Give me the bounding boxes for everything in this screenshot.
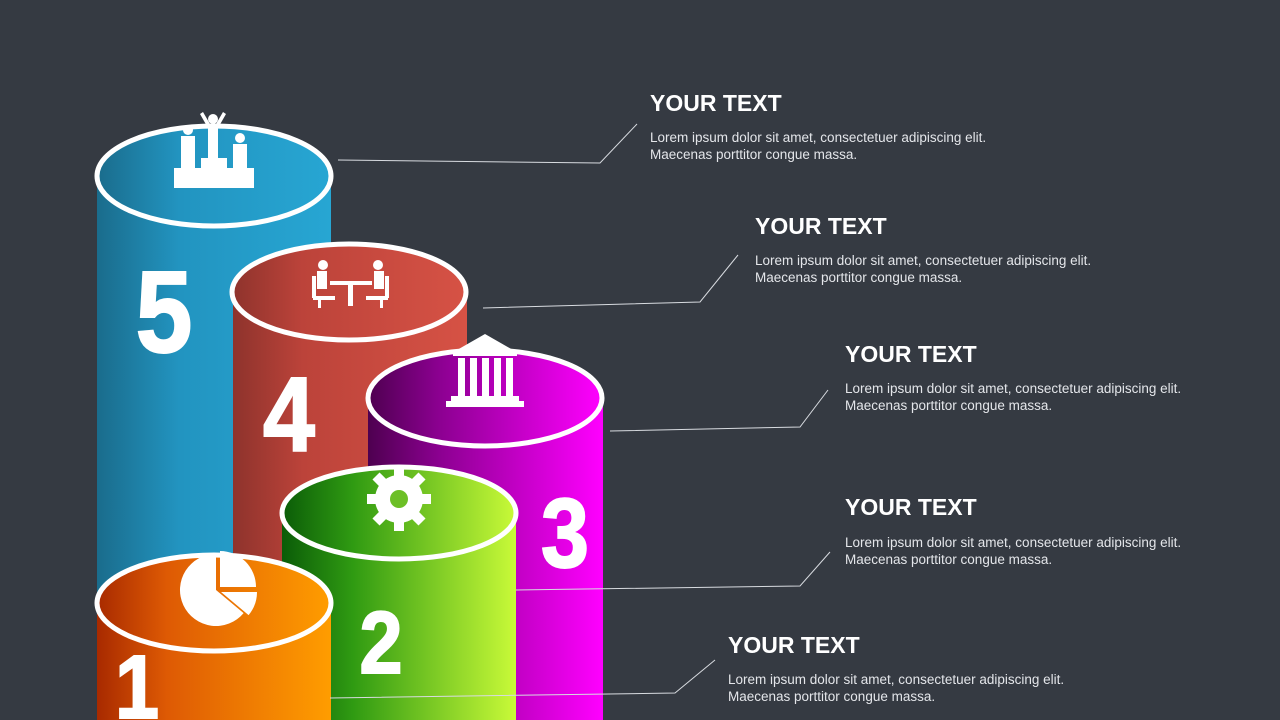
number 4: 4 <box>263 357 315 474</box>
icon: gear <box>367 467 431 531</box>
cylinder 4 <box>232 244 467 720</box>
text block 5 <box>650 90 986 162</box>
icon: bank <box>446 334 524 407</box>
text block 5: YOUR TEXT <box>650 90 782 116</box>
text block 5: Lorem ipsum dolor sit amet, consectetuer adipiscing elit. <box>650 130 986 145</box>
text block 3: Lorem ipsum dolor sit amet, consectetuer adipiscing elit. <box>845 381 1181 396</box>
leader lines <box>330 124 830 698</box>
text block 2: Lorem ipsum dolor sit amet, consectetuer adipiscing elit. <box>845 535 1181 550</box>
icon: meeting <box>312 260 389 308</box>
text block 3: Maecenas porttitor congue massa. <box>845 398 1052 413</box>
text block 1: YOUR TEXT <box>728 632 860 658</box>
text block 4: Maecenas porttitor congue massa. <box>755 270 962 285</box>
icon: pie chart <box>180 551 257 626</box>
cylinder 5 <box>97 112 331 720</box>
text block 4: YOUR TEXT <box>755 213 887 239</box>
text block 3 <box>845 341 1181 413</box>
icon: podium <box>174 112 254 188</box>
text block 4 <box>755 213 1091 285</box>
text block 2: YOUR TEXT <box>845 494 977 520</box>
text block 2: Maecenas porttitor congue massa. <box>845 552 1052 567</box>
text block 1: Maecenas porttitor congue massa. <box>728 689 935 704</box>
number 2: 2 <box>359 593 403 692</box>
number 3: 3 <box>541 478 589 588</box>
text block 1 <box>728 632 1064 704</box>
number 5: 5 <box>136 248 192 377</box>
text block 3: YOUR TEXT <box>845 341 977 367</box>
text block 4: Lorem ipsum dolor sit amet, consectetuer adipiscing elit. <box>755 253 1091 268</box>
cylinder 2 <box>282 467 516 720</box>
text block 1: Lorem ipsum dolor sit amet, consectetuer adipiscing elit. <box>728 672 1064 687</box>
cylinder 1 <box>97 551 331 720</box>
cylinder 3 <box>368 334 603 720</box>
text block 5: Maecenas porttitor congue massa. <box>650 147 857 162</box>
text block 2 <box>845 494 1181 567</box>
